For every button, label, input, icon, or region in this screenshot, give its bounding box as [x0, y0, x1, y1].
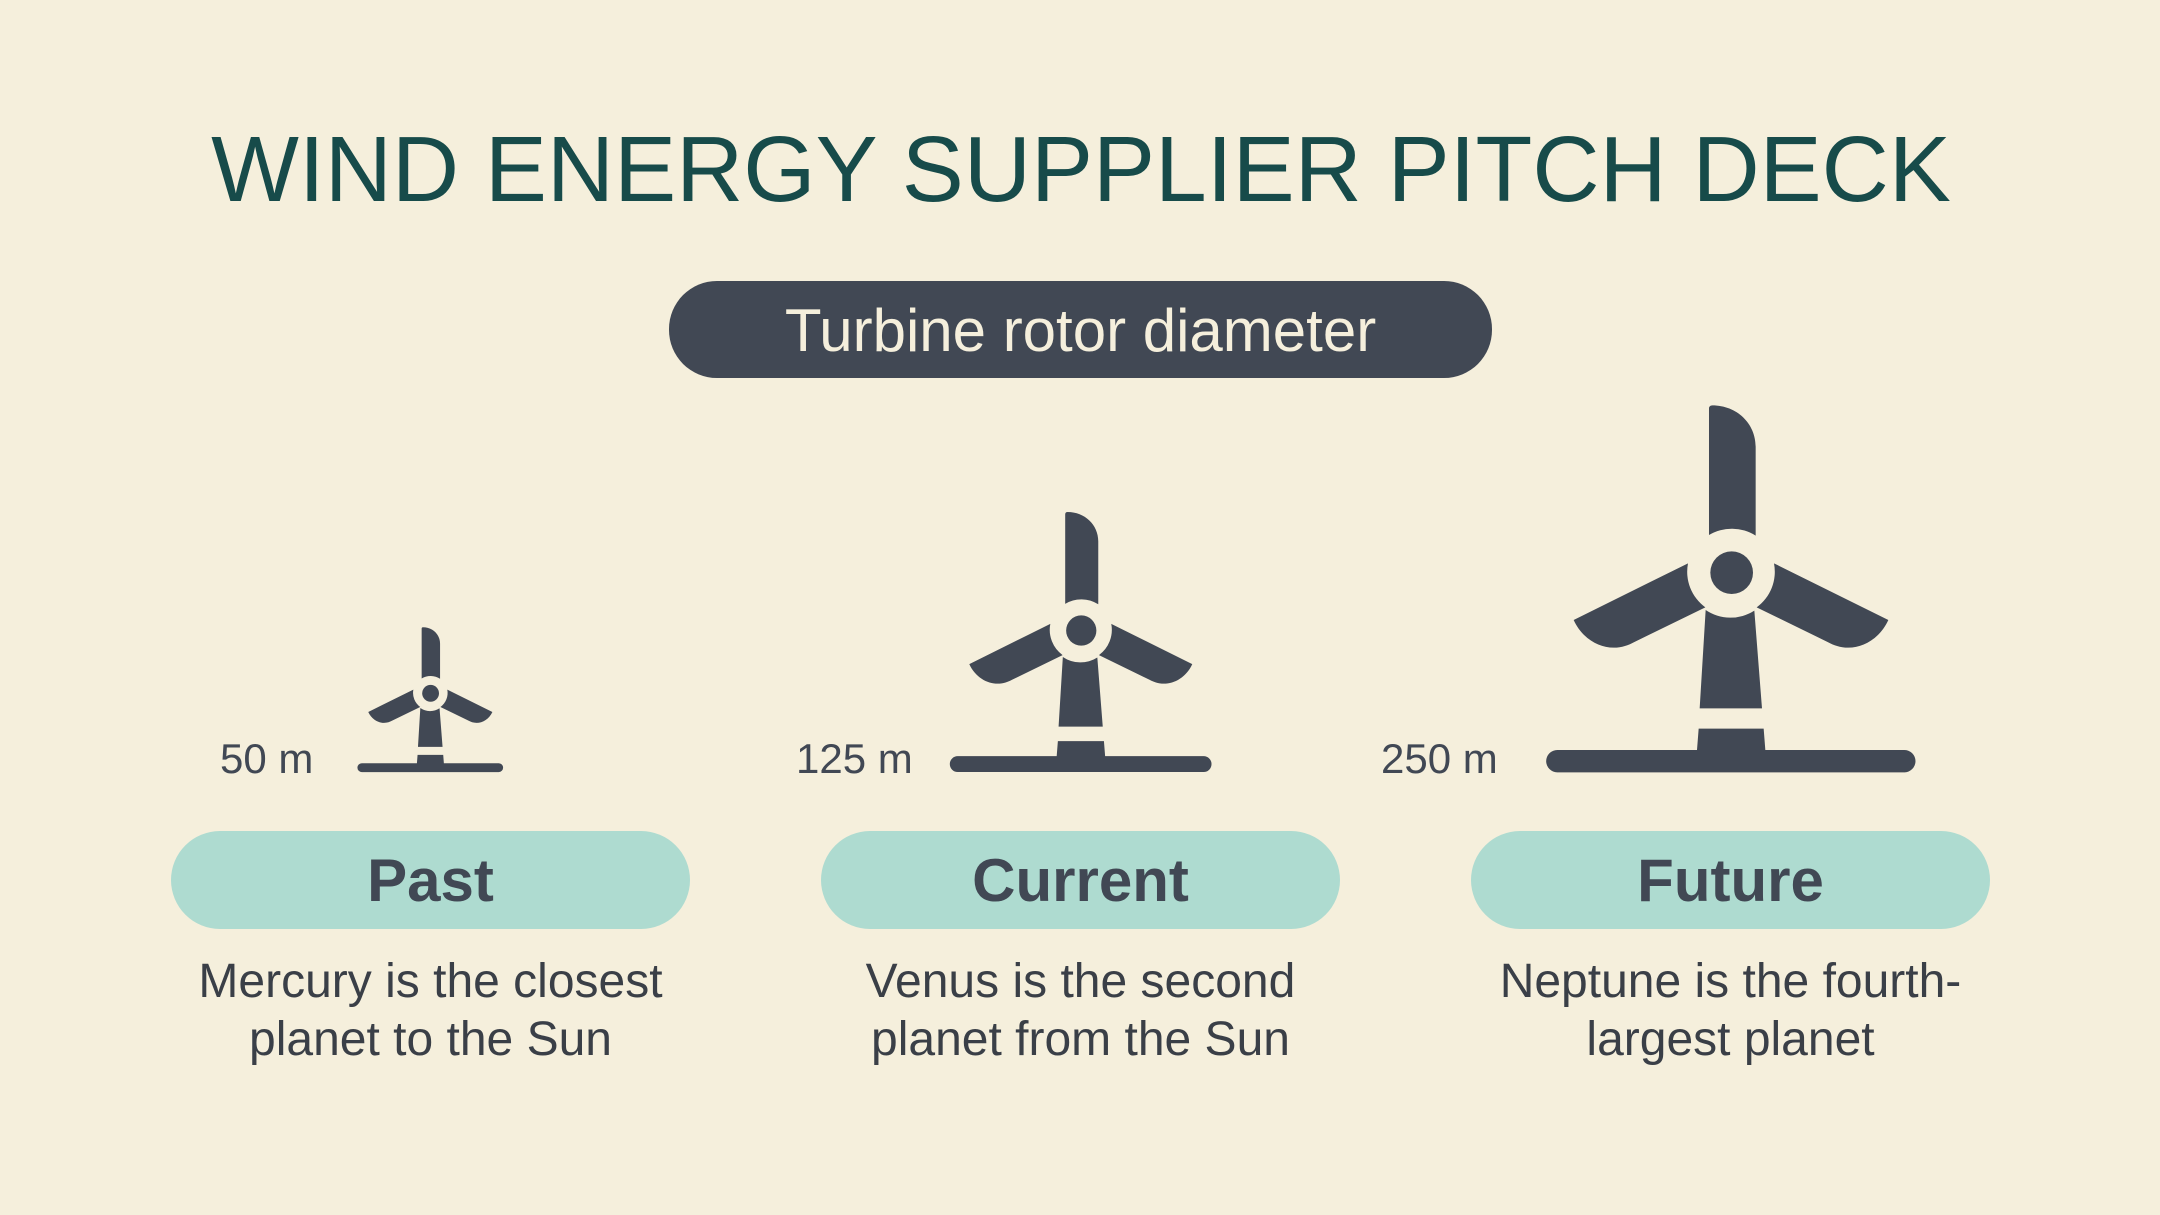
description: past: Mercury is the closest — [198, 955, 663, 1008]
heading pill: past: Past — [367, 847, 494, 914]
description: current: Venus is the second — [866, 955, 1295, 1008]
description: past: planet to the Sun — [249, 1013, 612, 1066]
icon: large wind turbine — [1546, 405, 1915, 772]
description: future — [1500, 955, 1961, 1066]
heading pill: current — [821, 831, 1340, 928]
heading pill: current: Current — [972, 847, 1189, 914]
description: past — [198, 955, 663, 1066]
label: 250 m: 250 m — [1381, 735, 1498, 782]
subtitle pill: turbine rotor diameter — [669, 281, 1492, 378]
description: current: planet from the Sun — [871, 1013, 1290, 1066]
heading pill: future: Future — [1637, 847, 1824, 914]
heading pill: future — [1471, 831, 1990, 928]
label: 50 m: 50 m — [220, 735, 313, 782]
heading pill: past — [171, 831, 690, 928]
description: current — [866, 955, 1295, 1066]
subtitle pill: turbine rotor diameter: Turbine rotor diameter — [785, 297, 1376, 364]
title: WIND ENERGY SUPPLIER PITCH DECK — [211, 117, 1951, 221]
description: future: Neptune is the fourth- — [1500, 955, 1961, 1008]
label: 125 m: 125 m — [796, 735, 913, 782]
icon: small wind turbine — [357, 627, 503, 772]
icon: medium wind turbine — [950, 512, 1212, 772]
description: future: largest planet — [1586, 1013, 1875, 1066]
